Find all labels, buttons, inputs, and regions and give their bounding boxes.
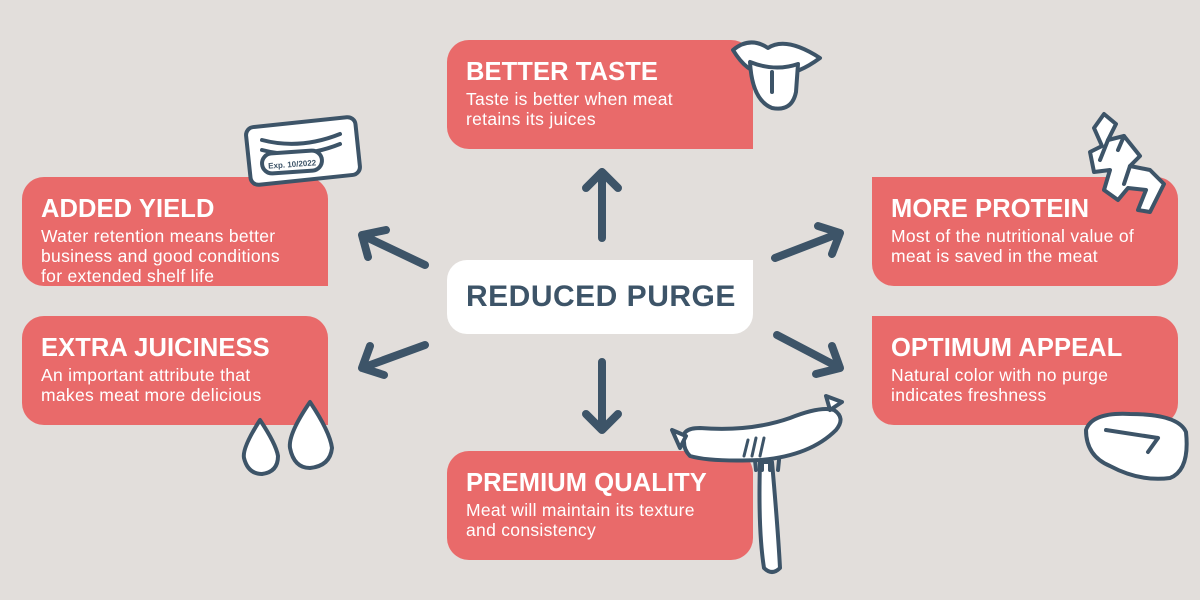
card: more protein: Most of the nutritional value of (891, 226, 1134, 246)
arrow: upper right (775, 226, 840, 258)
card: better taste: Taste is better when meat (466, 89, 673, 109)
card: extra juiciness: An important attribute that (41, 365, 250, 385)
arrow: upper left (362, 230, 425, 265)
card: added yield (22, 177, 328, 286)
icon: label package: Exp. 10/2022 (268, 158, 317, 171)
card: premium quality: Meat will maintain its texture (466, 500, 695, 520)
center: reduced purge (447, 260, 753, 334)
card: extra juiciness (22, 316, 328, 425)
card: premium quality (447, 451, 753, 560)
card: more protein: MORE PROTEIN (891, 195, 1089, 223)
card: added yield: for extended shelf life (41, 266, 214, 286)
icon: protein twist (1090, 114, 1164, 212)
card: optimum appeal: OPTIMUM APPEAL (891, 334, 1122, 362)
arrow: lower left (362, 345, 425, 375)
card: optimum appeal: indicates freshness (891, 385, 1047, 405)
card: better taste: BETTER TASTE (466, 58, 658, 86)
card: optimum appeal: Natural color with no purge (891, 365, 1108, 385)
icon: sausage on fork (672, 396, 842, 572)
card: more protein: meat is saved in the meat (891, 246, 1098, 266)
icon: label package (245, 116, 361, 186)
center: reduced purge: REDUCED PURGE (466, 280, 736, 313)
arrow: down (586, 362, 618, 430)
card: added yield: Water retention means better (41, 226, 275, 246)
arrow: lower right (777, 335, 840, 374)
icon: water drops (244, 402, 332, 474)
card: more protein (872, 177, 1178, 286)
card: optimum appeal (872, 316, 1178, 425)
card: better taste (447, 40, 753, 149)
icon: tongue (733, 42, 820, 109)
card: premium quality: PREMIUM QUALITY (466, 469, 707, 497)
icon: steak (1086, 414, 1187, 479)
arrow: up (586, 172, 618, 238)
card: added yield: ADDED YIELD (41, 195, 214, 223)
card: better taste: retains its juices (466, 109, 596, 129)
card: added yield: business and good conditions (41, 246, 280, 266)
card: extra juiciness: EXTRA JUICINESS (41, 334, 270, 362)
card: extra juiciness: makes meat more delicious (41, 385, 262, 405)
card: premium quality: and consistency (466, 520, 596, 540)
